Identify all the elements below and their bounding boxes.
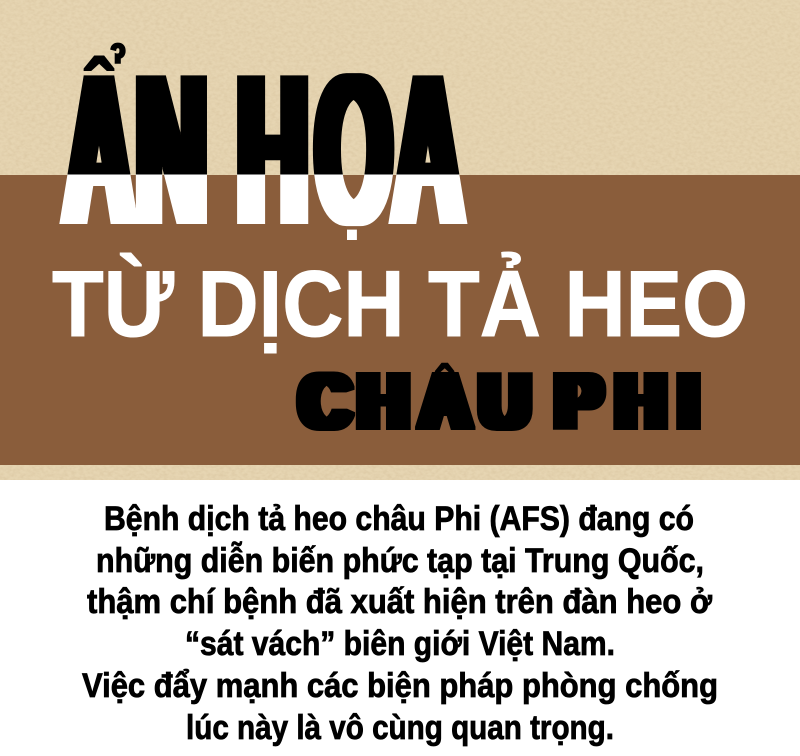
intro text block: “sát vách” biên giới Việt Nam. (185, 625, 615, 663)
title: ẨN HỌA: ˀ (110, 37, 126, 81)
intro text block: những diễn biến phức tạp tại Trung Quốc, (96, 542, 704, 580)
intro text block: lúc này là vô cùng quan trọng. (186, 709, 614, 747)
intro text block: thậm chí bệnh đã xuất hiện trên đàn heo ở (87, 583, 713, 621)
heading: CHÂU PHI: CHÂU PHI (300, 356, 698, 446)
title: ẨN HỌA: ẨN HỌA (64, 29, 463, 270)
paper background (0, 0, 800, 480)
title: ẨN HỌA: . (342, 177, 362, 255)
title: ẨN HỌA: ˆ (85, 44, 114, 133)
heading: CHÂU PHI: ˆ (436, 356, 454, 412)
intro text block (82, 500, 718, 747)
intro text block: Bệnh dịch tả heo châu Phi (AFS) đang có (104, 500, 694, 538)
brown title band (0, 175, 800, 465)
title: ẨN HỌA: ẨN HỌA (64, 29, 463, 270)
intro text block: Việc đẩy mạnh các biện pháp phòng chống (82, 667, 718, 705)
